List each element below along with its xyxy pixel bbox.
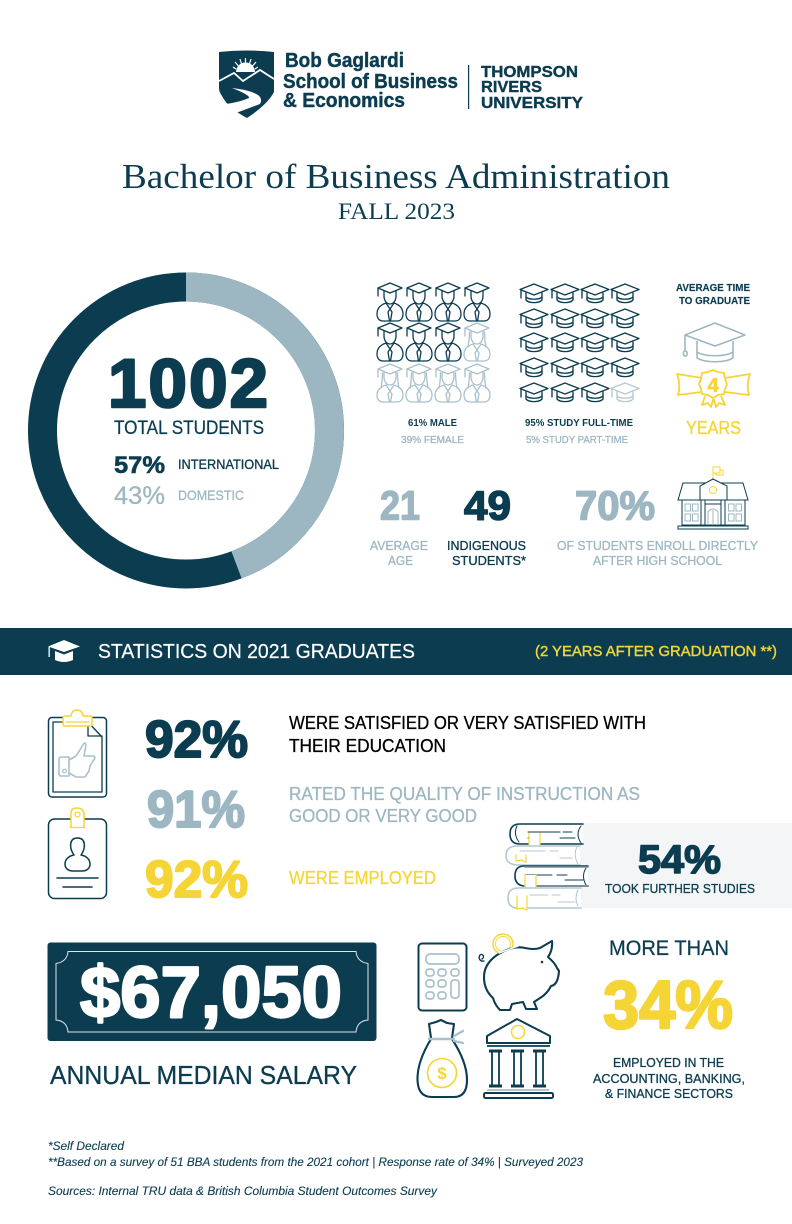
icon: money bag with dollar coin: $ — [437, 1064, 447, 1083]
panel: annual median salary — [48, 942, 376, 1041]
stat: employed: 92% — [145, 851, 248, 909]
icon: bank building — [484, 1019, 553, 1098]
domestic share: DOMESTIC — [178, 487, 244, 503]
heading: average time to graduate: TO GRADUATE — [679, 296, 750, 307]
study load labels: 95% STUDY FULL-TIME — [525, 417, 633, 429]
study load labels — [525, 417, 633, 446]
stat: indigenous students: INDIGENOUS — [447, 538, 526, 553]
icon: white graduation cap — [48, 640, 80, 662]
heading: average time to graduate — [676, 283, 750, 307]
stat: more than 34 percent in finance sectors: & FINANCE SECTORS — [605, 1087, 733, 1101]
domestic share: 43% — [114, 482, 165, 510]
icon: clipboard with thumbs up — [48, 710, 106, 797]
domestic share — [114, 482, 244, 510]
stat: enroll directly after high school: 70% — [575, 482, 655, 528]
stat: employed: WERE EMPLOYED — [289, 868, 436, 888]
footnotes — [48, 1141, 584, 1198]
stat: satisfied with education — [145, 711, 646, 769]
stat: more than 34 percent in finance sectors: EMPLOYED IN THE — [613, 1056, 724, 1070]
total count: 1002 — [108, 345, 268, 422]
university name — [481, 64, 583, 112]
footnotes: Sources: Internal TRU data & British Columbia Student Outcomes Survey — [48, 1186, 438, 1198]
banner heading: STATISTICS ON 2021 GRADUATES — [98, 641, 415, 663]
stat: average age: 21 — [380, 482, 420, 528]
study load labels: 5% STUDY PART-TIME — [526, 434, 628, 446]
stat: satisfied with education: THEIR EDUCATION — [289, 736, 446, 756]
gender labels: 39% FEMALE — [401, 434, 464, 446]
icon: diploma with ribbon and number 4 — [677, 370, 750, 407]
international share: INTERNATIONAL — [178, 456, 279, 472]
stat: satisfied with education: 92% — [145, 711, 248, 769]
icon: piggy bank with coin — [479, 934, 559, 1010]
school name: & Economics — [283, 89, 405, 112]
stat: quality of instruction — [147, 781, 640, 839]
university name: RIVERS — [481, 79, 542, 96]
panel: further studies — [580, 823, 792, 908]
icon: calculator — [418, 944, 466, 1010]
donut chart: total students — [42, 287, 330, 574]
logo: Bob Gaglardi School of Business and Thompson Rivers University — [219, 49, 583, 118]
international share — [114, 452, 279, 479]
stat: indigenous students: STUDENTS* — [452, 553, 526, 568]
stat: average age: AVERAGE — [370, 538, 428, 553]
stat: quality of instruction: RATED THE QUALITY OF INSTRUCTION AS — [289, 784, 640, 804]
icon grid: gender split — [377, 283, 490, 402]
icon: id badge — [48, 808, 106, 898]
heading: average time to graduate: AVERAGE TIME — [676, 283, 750, 294]
stat: quality of instruction: GOOD OR VERY GOOD — [289, 806, 477, 826]
stat: indigenous students — [447, 482, 526, 568]
further studies percentage: 54% — [638, 838, 721, 882]
icon: money bag with dollar coin — [417, 1020, 467, 1097]
further studies label: TOOK FURTHER STUDIES — [605, 881, 755, 896]
title: Bachelor of Business Administration — [122, 157, 670, 196]
gender labels: 61% MALE — [408, 417, 457, 429]
stat: employed — [145, 851, 436, 909]
stat: enroll directly after high school — [557, 482, 758, 568]
icon: school building — [678, 467, 748, 529]
school name — [283, 49, 458, 112]
stat: enroll directly after high school: AFTER HIGH SCHOOL — [593, 553, 722, 568]
stat: enroll directly after high school: OF STUDENTS ENROLL DIRECTLY — [557, 538, 758, 553]
icon: graduation cap — [684, 323, 745, 362]
gender labels — [401, 417, 464, 446]
stat: average age — [370, 482, 428, 568]
stat: more than 34 percent in finance sectors: ACCOUNTING, BANKING, — [593, 1072, 745, 1086]
banner note: (2 YEARS AFTER GRADUATION **) — [535, 643, 777, 660]
university name: THOMPSON — [481, 64, 578, 81]
subtitle: FALL 2023 — [338, 199, 455, 224]
stat: indigenous students: 49 — [464, 482, 511, 528]
icon: diploma with ribbon and number 4: 4 — [707, 375, 719, 397]
label: years: YEARS — [686, 418, 741, 438]
school name: Bob Gaglardi — [285, 49, 404, 72]
icon: stack of books — [506, 824, 588, 910]
university name: UNIVERSITY — [481, 95, 583, 112]
salary figure: $67,050 — [80, 953, 342, 1033]
stat: quality of instruction: 91% — [147, 781, 245, 839]
footnotes: **Based on a survey of 51 BBA students from the 2021 cohort | Response rate of 34% | Surveyed 2023 — [48, 1157, 584, 1169]
stat: more than 34 percent in finance sectors: 34% — [603, 967, 733, 1043]
school name: School of Business — [283, 70, 458, 93]
international share: 57% — [114, 452, 165, 479]
stat: satisfied with education: WERE SATISFIED OR VERY SATISFIED WITH — [289, 713, 646, 733]
footnotes: *Self Declared — [48, 1141, 125, 1153]
icon grid: study load — [520, 284, 639, 402]
icon: shield with sun and mountains — [219, 50, 274, 118]
total label: TOTAL STUDENTS — [114, 418, 264, 439]
stat: more than 34 percent in finance sectors — [593, 937, 745, 1101]
salary label: ANNUAL MEDIAN SALARY — [50, 1060, 357, 1090]
stat: average age: AGE — [388, 553, 413, 568]
banner: statistics on 2021 graduates — [0, 628, 792, 675]
stat: more than 34 percent in finance sectors: MORE THAN — [609, 937, 729, 960]
